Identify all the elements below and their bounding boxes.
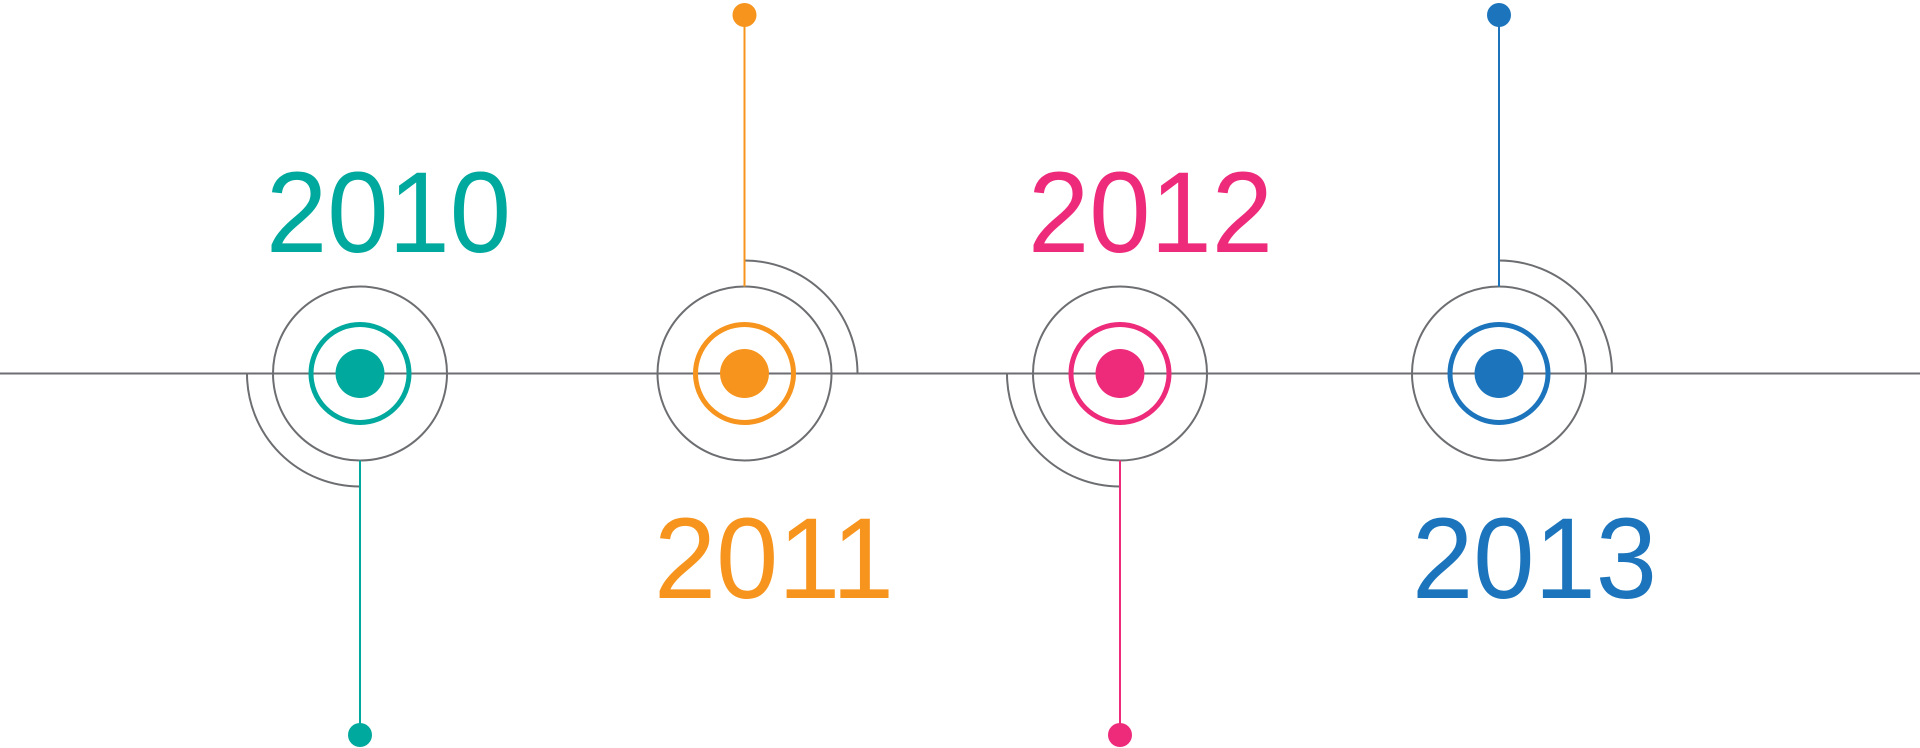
node: 2013: 2013: [1412, 495, 1657, 623]
node: 2011: [654, 3, 894, 623]
node: 2012: [1007, 149, 1273, 747]
node: 2010: [247, 149, 511, 747]
node: 2010: 2010: [266, 149, 511, 277]
node: 2011: 2011: [654, 495, 894, 623]
node: 2012: 2012: [1028, 149, 1273, 277]
node: 2013: [1412, 3, 1657, 623]
main horizontal line: [0, 372, 1920, 374]
